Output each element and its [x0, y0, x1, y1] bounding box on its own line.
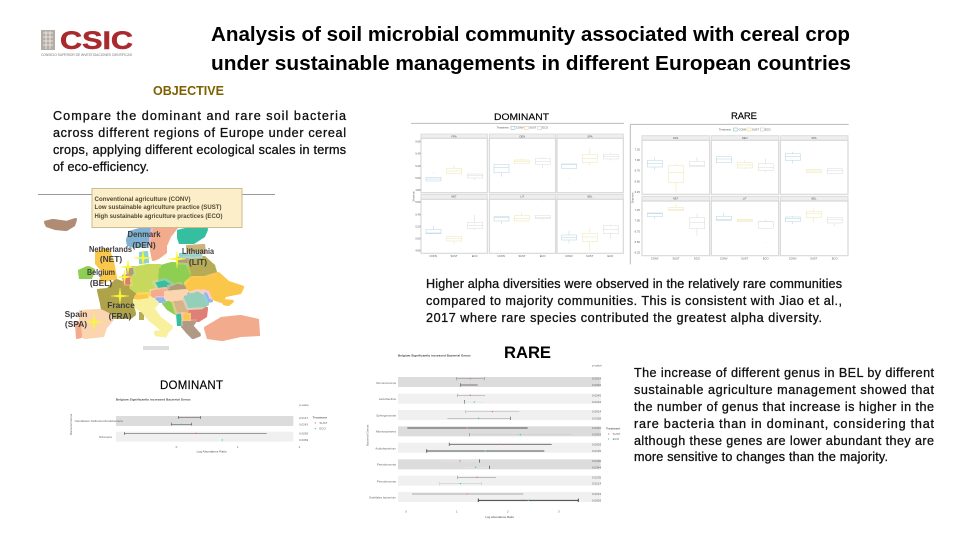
boxplot chart: dominant: SPA: [587, 134, 593, 138]
text block: genus increase: the number of genus that increase is higher in the: [634, 400, 934, 414]
logo: CSIC: CONSEJO SUPERIOR DE INVESTIGACIONES CIENTÍFICAS: [41, 53, 133, 57]
boxplot chart: dominant: SUST: [586, 254, 594, 258]
forest plot: dominant: 2: [299, 445, 301, 449]
text block: genus increase: [634, 366, 934, 464]
country labels: (NET): [100, 254, 122, 264]
forest plot: rare: 3: [558, 510, 560, 514]
boxplot chart: rare: 7.00: [635, 158, 640, 162]
boxplot chart: dominant: BEL: [587, 195, 593, 199]
forest plot: rare: 0.0003: [592, 498, 601, 502]
forest plot: rare: SUST: [613, 432, 621, 436]
text block: genus increase: sustainable agriculture management showed that: [634, 383, 934, 397]
forest plot: rare: 0.0032: [592, 383, 601, 387]
forest plot: rare: 1: [456, 510, 458, 514]
title: [211, 24, 851, 75]
forest plot: rare: 0.0328: [592, 416, 601, 420]
boxplot chart: dominant: CONV: [497, 254, 505, 258]
country labels: (FRA): [109, 311, 132, 321]
boxplot chart: dominant: 5.60: [415, 140, 421, 144]
country labels: (SPA): [65, 319, 87, 329]
forest plot: rare: Pseudomonas: [377, 479, 396, 483]
legend callout: [92, 188, 242, 228]
boxplot chart: rare: [630, 124, 849, 264]
forest plot: dominant: 0.0036: [299, 432, 308, 436]
country labels: (BEL): [90, 278, 112, 288]
text block: genus increase: although these genes are lower abundant they are: [634, 434, 934, 448]
map of Europe: [38, 188, 275, 349]
boxplot chart: dominant: SUST: [518, 254, 526, 258]
forest plot: rare: Treatment: [606, 426, 620, 430]
forest plot: rare: Lactobacillus: [379, 397, 396, 401]
boxplot chart: rare: 6.75: [635, 229, 640, 233]
heading: rare forest plot: RARE: [504, 344, 551, 362]
legend callout: Low sustainable agriculture practice (SUST): [94, 205, 222, 211]
forest plot: dominant: Candidatus Solibacter/Acidobacteria: [75, 419, 123, 423]
forest plot: rare: 0.0430: [592, 459, 601, 463]
heading: rare boxplots: RARE: [731, 111, 757, 122]
text block: objective: [53, 109, 346, 174]
boxplot chart: rare: 7.25: [635, 208, 640, 212]
heading: dominant boxplots: DOMINANT: [494, 112, 549, 123]
boxplot chart: dominant: ECO: [607, 254, 613, 258]
boxplot chart: rare: CONV: [651, 256, 659, 260]
boxplot chart: dominant: 5.20: [415, 164, 421, 168]
text block: genus increase: more sensitive to changes than the majority.: [634, 450, 888, 464]
boxplot chart: rare: Shannon: [631, 192, 635, 203]
country labels: Denmark: [128, 229, 161, 239]
country labels: France: [107, 300, 135, 310]
boxplot chart: dominant: ECO: [472, 254, 478, 258]
forest plot: rare: 0.0235: [592, 475, 601, 479]
boxplot chart: dominant: CONV: [516, 126, 524, 130]
forest plot: rare: 0.0003: [592, 442, 601, 446]
text block: genus increase: rare bacteria than in dominant, considering that: [634, 417, 934, 431]
forest plot: dominant: 0.0069: [299, 438, 308, 442]
text block: alpha diversity: [426, 277, 842, 325]
forest plot: dominant: 0.0147: [299, 416, 308, 420]
boxplot chart: dominant: Shannon: [412, 191, 416, 202]
forest plot: rare: 0.0125: [592, 449, 601, 453]
heading: dominant forest plot: DOMINANT: [160, 380, 223, 392]
text block: alpha diversity: compared to majority communities. This is consistent with Jiao et al.,: [426, 294, 842, 308]
title: under sustainable managements in different European countries: [211, 53, 851, 75]
boxplot chart: rare: SPA: [811, 136, 817, 140]
forest plot: rare: p-value: [592, 364, 602, 368]
boxplot chart: rare: SUST: [741, 256, 749, 260]
boxplot chart: dominant: [411, 123, 624, 258]
boxplot chart: dominant: NET: [451, 195, 457, 199]
boxplot chart: rare: CONV: [789, 256, 797, 260]
text block: objective: crops, applying different ecological scales in terms: [53, 143, 346, 157]
forest plot: dominant: Belgium Significantly increased Bacterial Genus: [116, 398, 191, 402]
boxplot chart: rare: ECO: [763, 256, 769, 260]
forest plot: dominant: Bacterial Genus: [69, 413, 73, 435]
boxplot chart: rare: DEN: [742, 136, 748, 140]
boxplot chart: rare: ECO: [765, 127, 771, 131]
forest plot: dominant: Treatment: [313, 416, 327, 420]
text block: objective: Compare the dominant and rare soil bacteria: [53, 109, 346, 123]
text block: objective: across different regions of Europe under cereal: [53, 126, 346, 140]
boxplot chart: dominant: 5.40: [415, 152, 421, 156]
boxplot chart: dominant: LIT: [520, 195, 525, 199]
forest plot: rare: 0: [405, 510, 407, 514]
boxplot chart: dominant: ECO: [540, 254, 546, 258]
forest plot: rare: 2: [507, 510, 509, 514]
forest plot: rare: Acidobacterium: [375, 447, 397, 451]
forest plot: rare: 0.0214: [592, 482, 601, 486]
forest plot: rare: 0.0014: [592, 410, 601, 414]
boxplot chart: dominant: 4.80: [415, 188, 421, 192]
boxplot chart: dominant: SUST: [529, 126, 537, 130]
forest plot: rare: Belgium Significantly increased Bacterial Genus: [398, 354, 471, 358]
boxplot chart: rare: CONV: [720, 256, 728, 260]
forest plot: dominant: SUST: [319, 421, 327, 425]
country labels: Spain: [65, 309, 87, 319]
boxplot chart: rare: 7.25: [635, 147, 640, 151]
boxplot chart: dominant: 5.60: [415, 200, 421, 204]
forest plot: rare: 0.0033: [592, 433, 601, 437]
forest plot: rare: Nitrososphaera: [376, 430, 396, 434]
boxplot chart: rare: ECO: [694, 256, 700, 260]
boxplot chart: dominant: SUST: [450, 254, 458, 258]
boxplot chart: dominant: DEN: [520, 134, 525, 138]
logo: CSIC: [41, 27, 133, 57]
boxplot chart: dominant: 4.80: [415, 249, 421, 253]
boxplot chart: rare: SUST: [672, 256, 680, 260]
boxplot chart: dominant: 5.00: [415, 176, 421, 180]
forest plot: rare: 0.0243: [592, 492, 601, 496]
text block: objective: of eco-efficiency.: [53, 160, 149, 174]
boxplot chart: dominant: ECO: [542, 126, 548, 130]
boxplot chart: rare: FRA: [673, 136, 679, 140]
forest plot: rare: Bacterial Genus: [366, 424, 370, 446]
forest plot: dominant: Nitrospira: [99, 435, 112, 439]
logo: CSIC: CSIC: [60, 27, 133, 55]
legend callout: Conventional agriculture (CONV): [94, 197, 190, 203]
forest plot: rare: [366, 354, 621, 519]
forest plot: rare: Pseudomonas: [377, 463, 396, 467]
location stars: [85, 250, 186, 331]
boxplot chart: rare: SUST: [810, 256, 818, 260]
forest plot: rare: ECO: [613, 437, 620, 441]
boxplot chart: dominant: 5.00: [415, 236, 421, 240]
country labels: [65, 229, 214, 329]
forest plot: dominant: 0.0243: [299, 422, 308, 426]
text block: alpha diversity: Higher alpha diversities were observed in the relatively rare communities: [426, 277, 842, 291]
forest plot: rare: Sphingomonas: [376, 414, 396, 418]
forest plot: dominant: ECO: [319, 427, 326, 431]
boxplot chart: dominant: FRA: [451, 134, 457, 138]
forest plot: rare: Gaiellales bacterium: [369, 495, 397, 499]
boxplot chart: rare: LIT: [743, 197, 747, 201]
forest plot: rare: Log Abundance Ratio: [485, 515, 514, 519]
boxplot chart: rare: 6.25: [635, 251, 640, 255]
boxplot chart: rare: CONV: [739, 127, 747, 131]
legend callout: High sustainable agriculture practices (ECO): [94, 214, 222, 220]
forest plot: rare: Ruminococcus: [376, 381, 397, 385]
boxplot chart: dominant: 5.40: [415, 212, 421, 216]
boxplot chart: rare: NET: [673, 197, 679, 201]
forest plot: rare: 0.0234: [592, 400, 601, 404]
forest plot: dominant: p-value: [299, 403, 309, 407]
boxplot chart: rare: ECO: [832, 256, 838, 260]
boxplot chart: dominant: CONV: [429, 254, 437, 258]
heading: objective: OBJECTIVE: [153, 84, 224, 98]
forest plot: rare: 0.0014: [592, 377, 601, 381]
boxplot chart: dominant: CONV: [565, 254, 573, 258]
map land shapes: [45, 219, 259, 349]
country labels: (LIT): [189, 257, 207, 267]
forest plot: rare: 0.0245: [592, 393, 601, 397]
country labels: Netherlands: [89, 244, 132, 254]
forest plot: dominant: [69, 398, 327, 454]
forest plot: rare: 0.0240: [592, 426, 601, 430]
forest plot: dominant: Log Abundance Ratio: [197, 450, 227, 454]
boxplot chart: rare: SUST: [752, 127, 759, 131]
country labels: (DEN): [132, 240, 156, 250]
text block: alpha diversity: 2017 where rare species contributed the greatest alpha diversity.: [426, 311, 822, 325]
forest plot: dominant: 0: [176, 445, 178, 449]
boxplot chart: rare: 6.50: [635, 240, 640, 244]
boxplot chart: rare: 6.25: [635, 190, 640, 194]
boxplot chart: rare: BEL: [811, 197, 817, 201]
forest plot: dominant: 1: [237, 445, 239, 449]
country labels: Belgium: [87, 267, 115, 277]
boxplot chart: rare: 6.50: [635, 179, 640, 183]
boxplot chart: rare: Treatment: [719, 127, 731, 131]
title: Analysis of soil microbial community associated with cereal crop: [211, 24, 850, 46]
boxplot chart: rare: 6.75: [635, 169, 640, 173]
boxplot chart: dominant: 5.20: [415, 224, 421, 228]
text block: genus increase: The increase of different genus in BEL by different: [634, 366, 934, 380]
country labels: Lithuania: [182, 246, 214, 256]
forest plot: rare: 0.0344: [592, 465, 601, 469]
boxplot chart: rare: 7.00: [635, 219, 640, 223]
boxplot chart: dominant: Treatment: [497, 126, 509, 130]
